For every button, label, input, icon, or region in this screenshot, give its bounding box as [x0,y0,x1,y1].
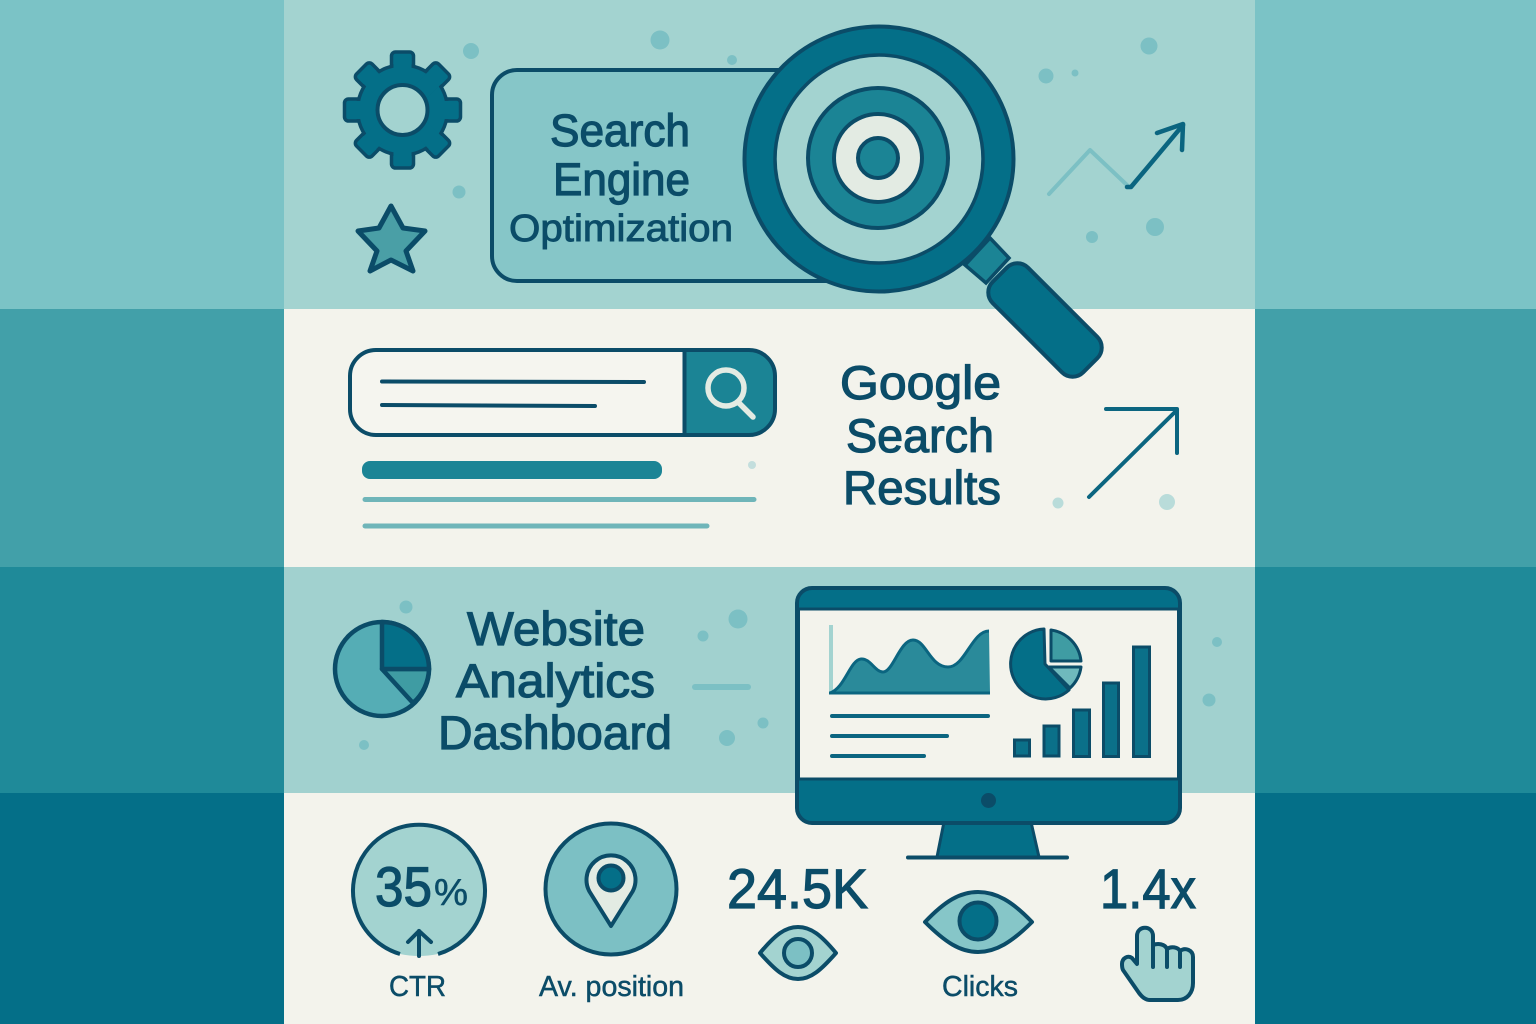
heading: search engine optimization: Search [550,105,690,156]
icon: gear [344,52,460,168]
icon: search glass [708,370,753,417]
heading: website analytics dashboard: Website [467,602,645,655]
decorative dots: analytics panel [359,600,1222,750]
search engine optimization box [492,70,872,281]
icon: up arrow [408,931,431,956]
metric: average position [539,824,684,1003]
heading: search engine optimization: Optimization [509,208,733,250]
heading: website analytics dashboard [438,602,672,759]
icon: hand pointer [1122,928,1193,1000]
metric: CTR: CTR [389,971,446,1003]
icon: pie chart [335,622,429,716]
metric: multiplier [1100,857,1196,1000]
panel: google search results [284,309,1255,567]
bar chart [1014,647,1150,756]
heading: google search results: Search [846,409,994,462]
icon: trend arrow [1049,124,1183,194]
icon: magnifying glass target [744,26,1108,383]
icon: growth arrow [1089,409,1177,497]
icon: star [358,206,425,271]
metric: average position: Av. position [539,971,684,1003]
text lines [832,716,988,756]
metric: clicks [925,892,1032,1003]
search bar [350,350,775,435]
heading: search engine optimization: Engine [553,154,690,205]
monitor stand [908,822,1067,858]
metric: impressions: 24.5K [727,857,868,920]
metric: clicks: Clicks [942,971,1018,1003]
decorative dots: results panel [1052,494,1175,510]
heading: google search results: Google [840,356,1001,409]
panel: website analytics dashboard [284,567,1255,793]
heading: website analytics dashboard: Dashboard [438,706,672,759]
icon: monitor dashboard [797,588,1180,858]
icon: large eye [925,892,1032,952]
icon: small eye [760,927,836,979]
heading: website analytics dashboard: Analytics [456,654,655,707]
metric: CTR [353,825,485,1003]
metric: CTR: % [434,872,468,913]
icon: location pin [586,855,635,926]
heading: search engine optimization [509,105,733,250]
metric: impressions [727,857,868,979]
area chart [829,625,990,693]
panel: metrics [284,793,1255,1024]
metric: multiplier: 1.4x [1100,857,1196,920]
mini pie chart [1011,629,1081,699]
decorative dots: top panel [452,30,1164,243]
heading: google search results [840,356,1001,514]
panel: search engine optimization [284,0,1255,309]
heading: google search results: Results [843,461,1001,514]
metric: CTR: 35 [375,855,432,918]
result lines [362,461,756,526]
